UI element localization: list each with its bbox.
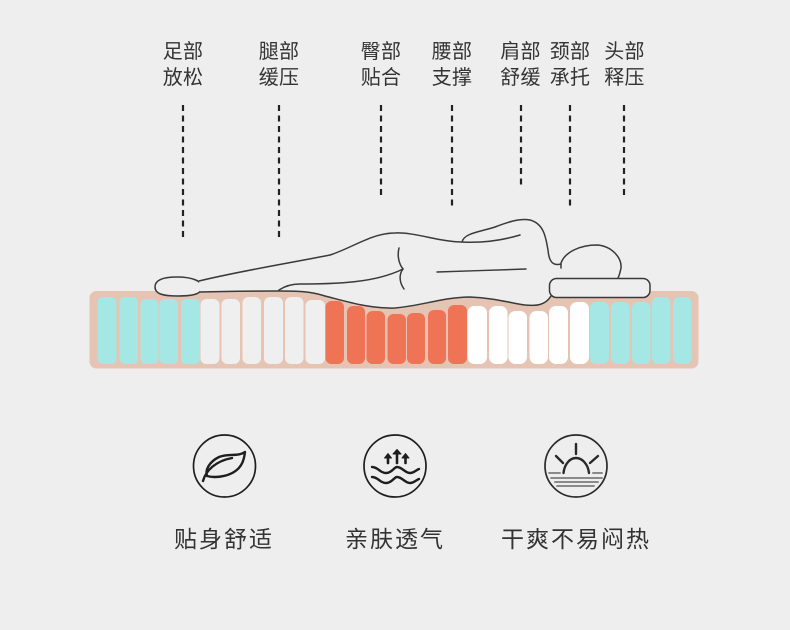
body fill [199,220,619,308]
label: hip: 臀部 [361,40,401,63]
caption: 贴身舒适 [174,526,274,552]
label: hip: 贴合 [361,66,401,89]
feature: breathable [345,435,445,552]
label: foot: 足部 [163,40,203,63]
label: head [604,40,645,89]
springs: light grey leg zone [200,297,325,364]
label: neck: 承托 [550,66,590,89]
label: waist: 腰部 [432,40,472,63]
mattress base [90,291,698,368]
upper leg and back contour [199,233,520,281]
sleeping figure outline [155,219,650,308]
springs: cyan head zone [590,297,692,364]
lower leg contour [279,269,403,290]
feature: comfort [174,435,274,552]
label: foot [163,40,203,89]
label: leg [259,40,299,89]
label: waist: 支撑 [432,66,472,89]
head contour [561,245,621,278]
label: neck: 颈部 [550,40,590,63]
dashed leader lines [183,105,624,240]
label: head: 头部 [604,40,645,63]
label: shoulder [500,40,541,89]
label: foot: 放松 [163,66,203,89]
springs: cyan foot zone [98,297,200,364]
caption: 亲肤透气 [345,526,445,552]
icon: sun over horizon [545,435,607,497]
hip crease [398,248,404,289]
label: shoulder: 肩部 [500,40,541,63]
label: leg: 缓压 [259,66,299,89]
icon: waves and arrows [364,435,426,497]
label: leg: 腿部 [259,40,299,63]
foot pad [155,277,202,296]
label: waist [432,40,472,89]
label: hip [361,40,401,89]
body zone labels [163,40,645,89]
pillow [550,278,650,298]
feature: dry [501,435,651,552]
arm and shoulder contour [462,219,561,264]
underside contour [200,291,551,308]
caption: 干爽不易闷热 [501,526,651,552]
label: neck [550,40,590,89]
mattress [90,291,698,368]
label: head: 释压 [604,66,645,89]
label: shoulder: 舒缓 [500,66,541,89]
springs: orange hip zone [326,301,467,364]
springs: white waist and shoulder zone [468,302,589,364]
icon: leaf [194,435,256,497]
back line [437,269,526,272]
